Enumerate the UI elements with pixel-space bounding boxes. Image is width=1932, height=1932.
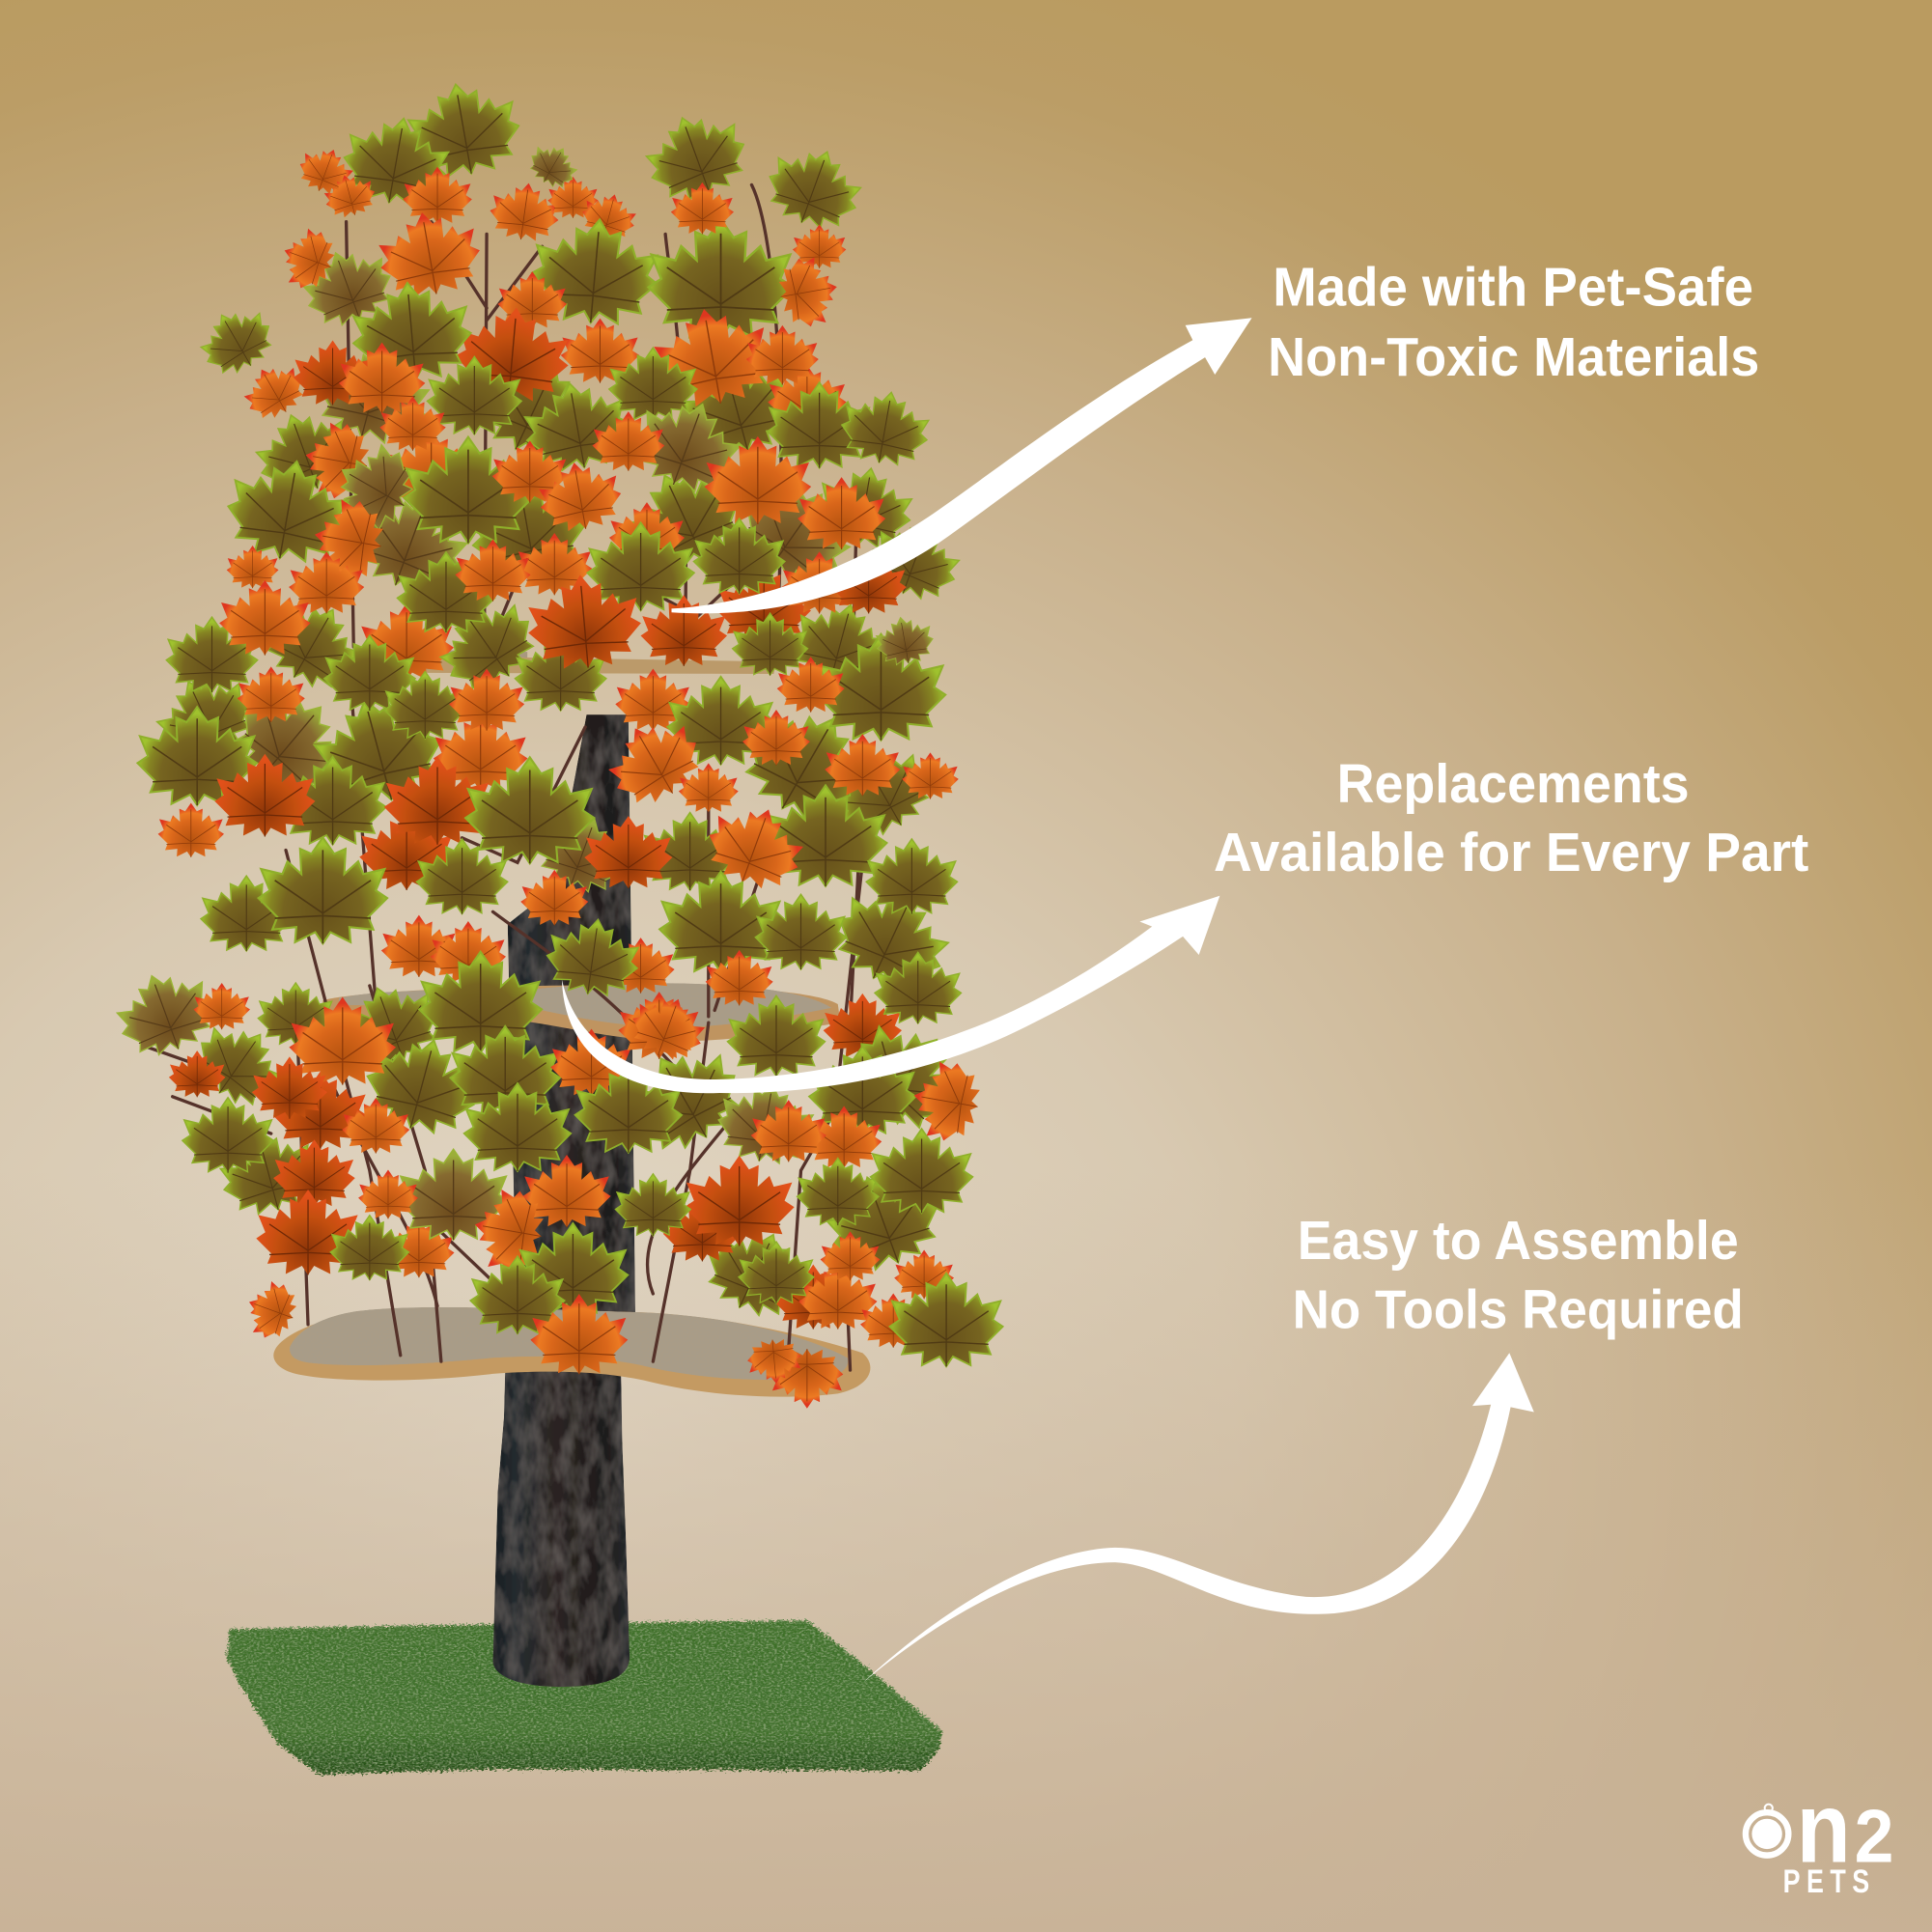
- callout: replacement parts: [1214, 753, 1809, 882]
- bottom shelf: [273, 1307, 870, 1397]
- arrow: replacement parts: [562, 896, 1219, 1093]
- callout: pet-safe materials: [1268, 256, 1759, 387]
- top shelf: [335, 650, 776, 674]
- callout: replacement parts: Available for Every Part: [1214, 822, 1809, 882]
- logo: On2 Pets: n: [1797, 1771, 1851, 1883]
- icon: pet tag: [1746, 1805, 1788, 1856]
- maple foliage: [107, 74, 1003, 1409]
- cat tree product: [107, 74, 1003, 1775]
- callout: easy assembly: Easy to Assemble: [1298, 1210, 1739, 1271]
- callout: easy assembly: No Tools Required: [1293, 1279, 1744, 1340]
- logo: On2 Pets: [1746, 1771, 1893, 1900]
- branches: [148, 184, 862, 1370]
- logo: On2 Pets: 2: [1855, 1795, 1893, 1878]
- logo: On2 Pets: PETS: [1783, 1862, 1869, 1900]
- upper trunk: [508, 714, 635, 1356]
- lower trunk: [492, 1370, 630, 1687]
- callout: replacement parts: Replacements: [1337, 753, 1690, 814]
- grass base: [227, 1620, 942, 1775]
- callout: pet-safe materials: Made with Pet-Safe: [1273, 256, 1753, 317]
- arrow: pet-safe materials: [672, 318, 1252, 613]
- callout: pet-safe materials: Non-Toxic Materials: [1268, 326, 1759, 387]
- arrow: easy assembly: [862, 1353, 1534, 1683]
- callout: easy assembly: [1293, 1210, 1744, 1340]
- middle shelf: [322, 983, 840, 1041]
